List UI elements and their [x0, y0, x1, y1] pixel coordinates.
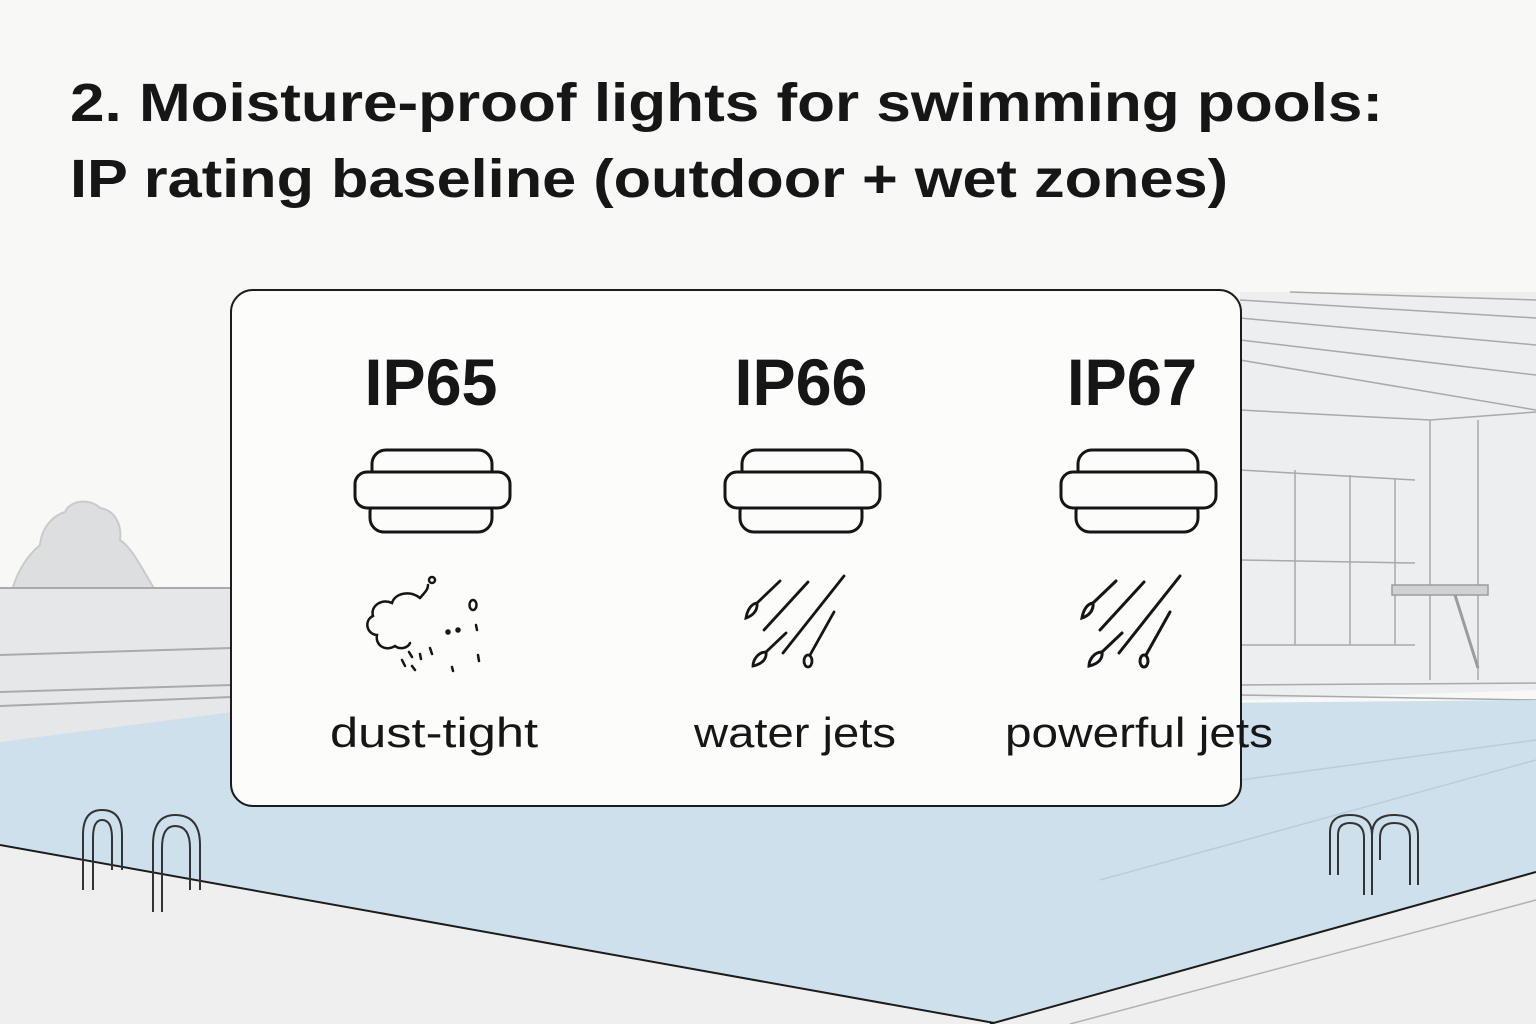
tree — [12, 502, 155, 590]
panel: IP ratings — [231, 290, 1273, 806]
icon: lamp IP67 — [1061, 450, 1216, 532]
title — [70, 73, 1383, 209]
IP67 column — [1005, 345, 1273, 756]
left wall — [0, 588, 232, 742]
diving board — [1392, 585, 1488, 595]
icon: water jets — [746, 576, 844, 667]
decks — [0, 845, 1000, 1024]
right interior — [1240, 292, 1536, 700]
ladders — [83, 810, 1418, 912]
IP67 column: powerful jets — [1005, 709, 1273, 756]
icon: dust — [367, 577, 479, 671]
IP67 column: IP67 — [1067, 345, 1197, 419]
IP65 column: dust-tight — [330, 709, 538, 756]
icon: lamp IP65 — [355, 450, 510, 532]
title: 2. Moisture-proof lights for swimming pools: — [70, 73, 1383, 133]
IP66 column: water jets — [693, 709, 896, 756]
IP65 column: IP65 — [364, 345, 498, 419]
IP65 column — [330, 345, 538, 756]
title: IP rating baseline (outdoor + wet zones) — [70, 149, 1228, 209]
icon: lamp IP66 — [725, 450, 880, 532]
water — [0, 700, 1536, 1024]
IP66 column — [693, 345, 896, 756]
icon: powerful jets — [1082, 576, 1180, 667]
IP66 column: IP66 — [734, 345, 868, 419]
